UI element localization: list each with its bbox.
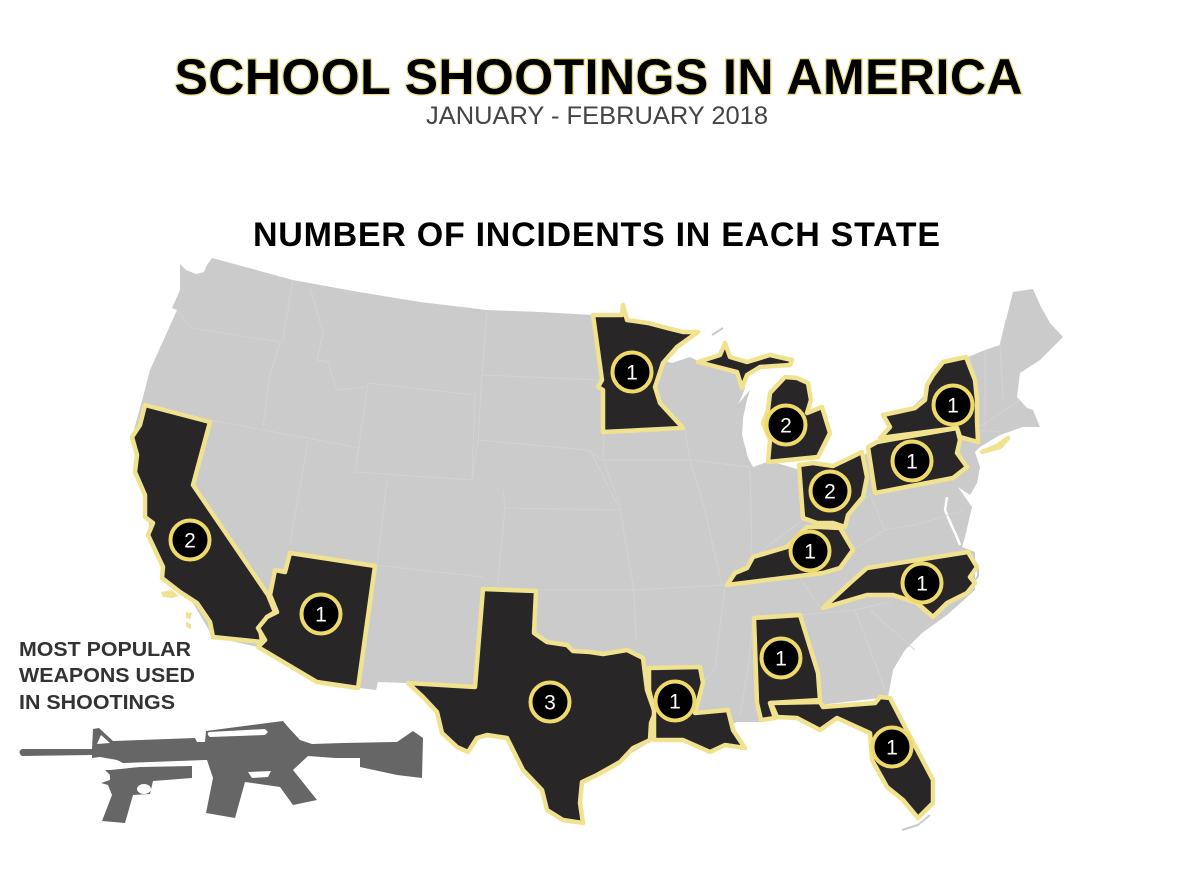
- state: Kentucky: [727, 527, 853, 585]
- state lines: [178, 280, 1020, 715]
- weapons heading: MOST POPULAR: [19, 638, 191, 661]
- state: California: [132, 405, 275, 642]
- state: New York: 1: [947, 394, 959, 418]
- count badge: [810, 472, 850, 510]
- state: Ohio: [799, 452, 867, 527]
- weapons heading: [19, 638, 195, 714]
- count badge: [892, 442, 932, 480]
- state: Kentucky: 1: [804, 540, 816, 564]
- state: Michigan: [698, 343, 830, 462]
- icon: rifle and pistol silhouettes: [20, 721, 423, 823]
- state: North Carolina: 1: [916, 572, 928, 596]
- map heading: NUMBER OF INCIDENTS IN EACH STATE: [253, 216, 940, 254]
- weapons heading: IN SHOOTINGS: [19, 691, 175, 714]
- state: Texas: [408, 589, 655, 823]
- count badge: [766, 406, 806, 444]
- state: New York: [880, 357, 1008, 452]
- state: Arizona: 1: [315, 604, 327, 626]
- count badge: [762, 638, 800, 678]
- Upper Peninsula: [698, 343, 792, 388]
- count badge: [656, 682, 694, 720]
- map: United States: [132, 258, 1063, 830]
- state: Minnesota: 1: [626, 362, 638, 384]
- state: Texas: 3: [544, 692, 556, 714]
- state: Alabama: [754, 615, 820, 720]
- icon: pistol: [101, 766, 192, 823]
- state: Florida: 1: [886, 736, 898, 760]
- state: Arizona: [258, 553, 375, 688]
- title: SCHOOL SHOOTINGS IN AMERICA: [174, 49, 1022, 105]
- Lower Peninsula: [763, 377, 830, 462]
- count badge: [612, 352, 652, 392]
- count badge: [790, 532, 830, 570]
- Long Island: [982, 438, 1008, 452]
- state: Ohio: 2: [824, 480, 836, 504]
- base map: unaffected states: [132, 258, 1063, 830]
- count badge: [530, 682, 570, 722]
- weapons heading: WEAPONS USED: [19, 664, 195, 687]
- state: Minnesota: [593, 305, 698, 432]
- state: Pennsylvania: [868, 428, 967, 493]
- count badge: [934, 386, 972, 424]
- count badge: [872, 728, 912, 766]
- state: Louisiana: 1: [669, 690, 681, 714]
- state: Alabama: 1: [775, 648, 787, 670]
- state: Pennsylvania: 1: [906, 450, 918, 474]
- icon: rifle: [20, 721, 423, 818]
- count badge: [170, 520, 210, 560]
- subtitle: JANUARY - FEBRUARY 2018: [426, 102, 768, 130]
- state: California: 2: [184, 530, 196, 552]
- Chesapeake Bay: [945, 497, 960, 545]
- Isle Royale, Outer Banks and Keys: [712, 328, 978, 830]
- count badge: [902, 564, 942, 602]
- state: Louisiana: [649, 667, 745, 752]
- state: Florida: [771, 697, 933, 818]
- Channel Islands: [161, 590, 192, 629]
- state: Michigan: 2: [780, 414, 792, 438]
- count badge: [302, 594, 340, 634]
- state: North Carolina: [823, 552, 977, 617]
